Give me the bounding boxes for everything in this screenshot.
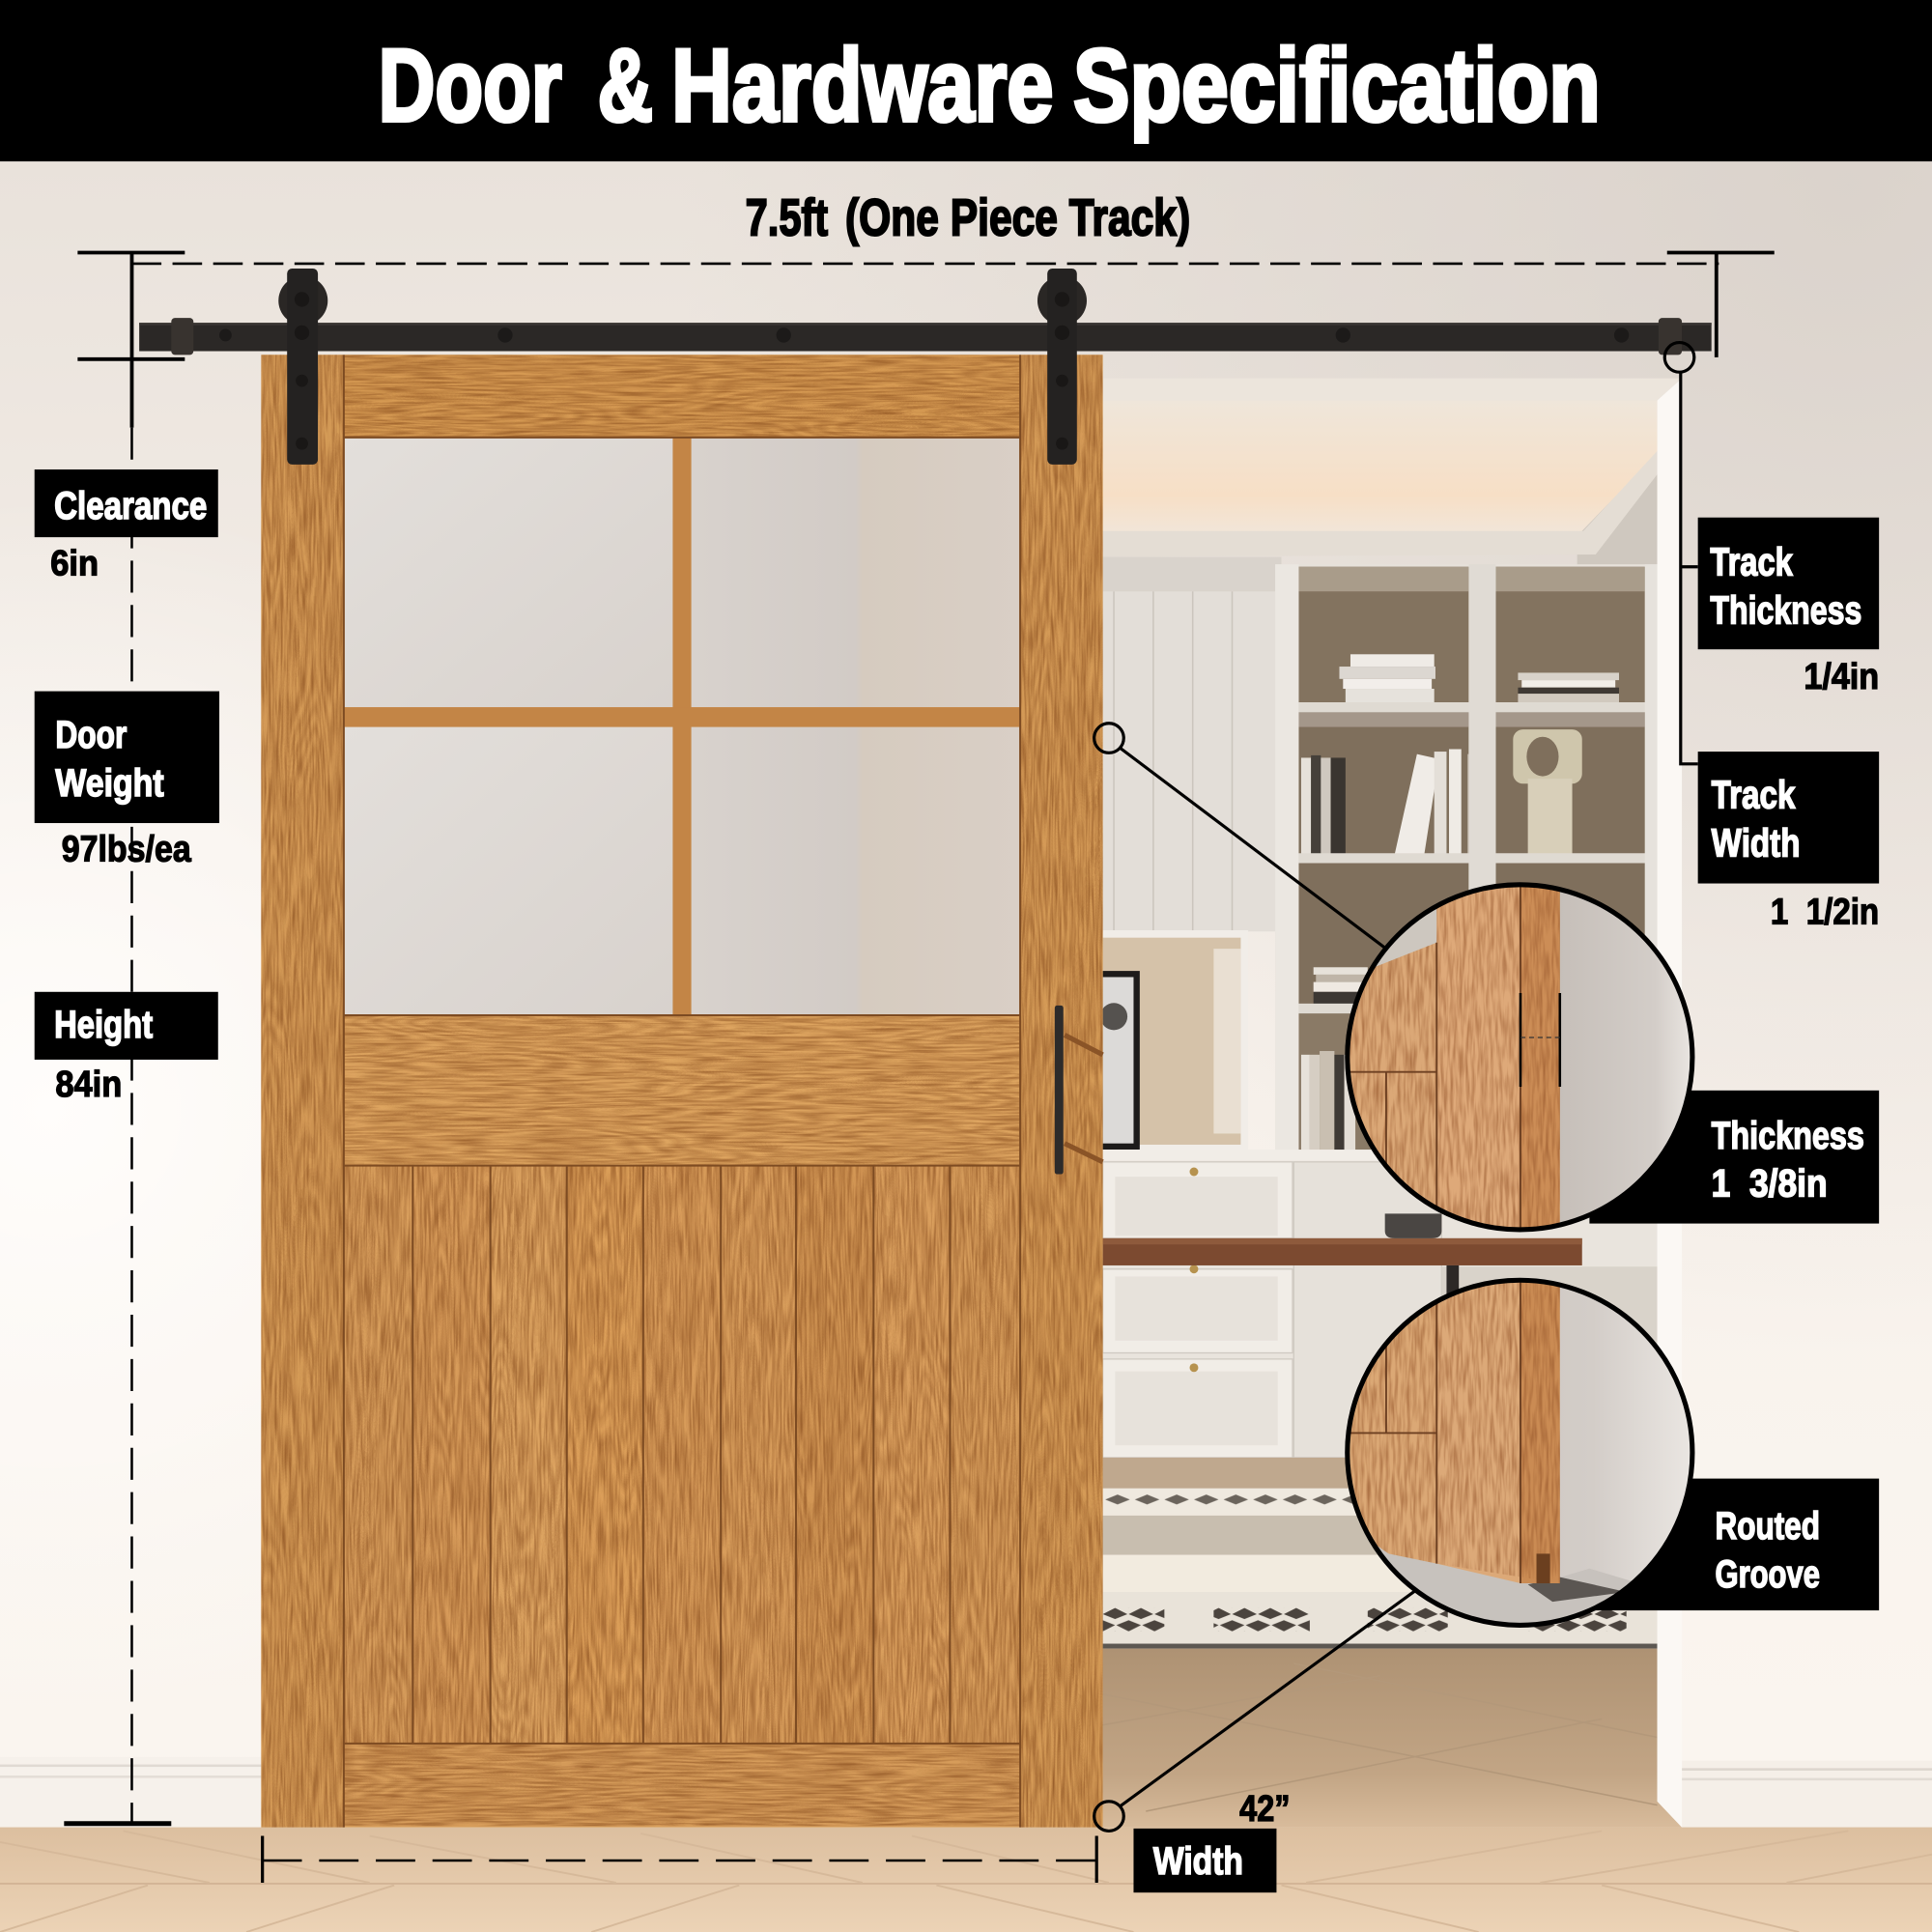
room behind detail: [1376, 909, 1437, 967]
label: track thickness: Thickness: [1710, 587, 1861, 632]
track length label: [746, 190, 1190, 247]
bookcase: [1275, 564, 1658, 1155]
label: thickness: Thickness: [1712, 1115, 1864, 1157]
track bolts: [219, 327, 1629, 343]
stacked books: [1339, 654, 1619, 702]
leader line: thickness: [1094, 724, 1386, 949]
label: track width: Track: [1712, 773, 1796, 817]
label: width: Width: [1153, 1840, 1243, 1883]
glass panes: [344, 438, 1020, 1015]
room floor: [1103, 1649, 1682, 1828]
label: track width: Width: [1712, 820, 1801, 865]
wood grain texture: [261, 355, 1103, 1828]
right stile: [1020, 355, 1103, 1828]
shelves: [1298, 707, 1658, 1009]
callout: door thickness detail: [1343, 881, 1695, 1238]
value: height: 84in: [55, 1064, 122, 1105]
label: height: [35, 992, 218, 1060]
lower shelf books: [1301, 967, 1368, 1152]
routed groove notch: [1537, 1553, 1550, 1583]
label: thickness: [1589, 1091, 1879, 1224]
label: door weight: Weight: [55, 762, 164, 805]
floor: [1519, 1569, 1631, 1623]
vertical planks: [344, 1166, 1020, 1744]
label: door weight: [35, 692, 219, 823]
label: routed groove: [1589, 1479, 1879, 1610]
title bar: Specification: [1073, 27, 1601, 143]
label: routed groove: Routed: [1716, 1505, 1820, 1548]
dimension: track length: [77, 252, 1775, 357]
label: routed groove: Groove: [1716, 1553, 1820, 1596]
title bar: [0, 0, 1932, 161]
label: width: [1133, 1829, 1276, 1892]
wainscot wall: [1103, 557, 1282, 931]
door panels: [1350, 943, 1435, 1206]
wall behind door edge: [1378, 1325, 1690, 1581]
sliding hanger left: [278, 269, 327, 465]
upright books: [1301, 750, 1485, 854]
wood floor: [0, 1828, 1932, 1932]
thickness dimension marks: [1520, 993, 1560, 1087]
door panels: [1350, 1304, 1435, 1563]
left stile: [261, 355, 344, 1828]
label: track thickness: [1698, 518, 1879, 649]
label: clearance: Clearance: [54, 485, 207, 527]
dimension: door width: [263, 1836, 1096, 1883]
label: clearance: [35, 469, 218, 537]
door handle: [1055, 1006, 1103, 1175]
value: clearance: 6in: [50, 544, 99, 583]
door slab base: [261, 355, 1103, 1828]
wall behind door edge: [1559, 893, 1690, 1223]
barn door: [261, 355, 1103, 1828]
dimension: clearance and height: [64, 252, 185, 1824]
label: thickness: 1 3/8in: [1712, 1163, 1828, 1206]
room seen through the doorway: [1100, 401, 1682, 1828]
room ceiling: [1103, 401, 1658, 536]
sculpture: [1513, 729, 1582, 854]
track length label: 7.5ft: [746, 190, 828, 247]
top rail: [344, 355, 1020, 438]
callout: routed groove detail: [1343, 1276, 1700, 1634]
track stoppers: [171, 318, 1682, 355]
label: height: Height: [54, 1004, 153, 1046]
leader lines: track: [1664, 343, 1698, 764]
plank grooves and panel joints: [344, 355, 1020, 1828]
sliding hanger right: [1037, 269, 1087, 465]
value: width: 42”: [1239, 1788, 1290, 1830]
track length label: (One Piece Track): [845, 190, 1190, 247]
desk: [1103, 1213, 1582, 1302]
crown moulding: [1103, 451, 1658, 557]
room rug: [1103, 1458, 1658, 1649]
value: track thickness: 1/4in: [1804, 656, 1879, 697]
bottom rail: [344, 1744, 1020, 1826]
cabinets: [1103, 1150, 1658, 1466]
value: track width: 1 1/2in: [1771, 892, 1879, 933]
door jamb and soffit: [1103, 379, 1682, 1828]
label: track thickness: Track: [1710, 540, 1793, 584]
framed art: [1100, 930, 1248, 1150]
middle rail: [344, 1015, 1020, 1166]
value: door weight: 97lbs/ea: [62, 829, 191, 870]
side wall: [1577, 453, 1658, 567]
baseboards: [0, 1757, 1932, 1829]
title bar: &: [598, 27, 653, 143]
muntins: [344, 438, 1020, 1015]
label: track width: [1698, 752, 1879, 884]
title bar: Hardware: [671, 27, 1054, 143]
barn door track: [139, 318, 1712, 355]
leader line: routed groove and width: [1094, 1589, 1417, 1831]
label: door weight: Door: [55, 714, 127, 756]
title bar: Door: [379, 27, 562, 143]
